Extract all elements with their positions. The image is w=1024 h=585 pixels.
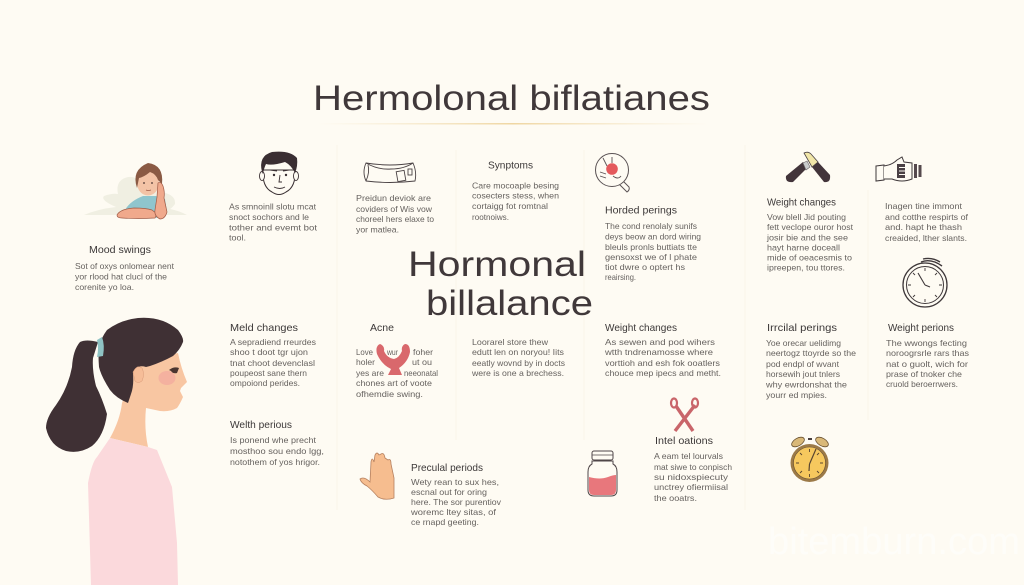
text: weight perions (886, 338, 969, 389)
icon: belt (364, 163, 416, 182)
hair (98, 318, 183, 403)
heading: irrcilal perings: Irrcilal perings (767, 322, 837, 334)
text: meld changes: A sepradiend rreurdes (230, 337, 316, 347)
text: meld changes: poupeost sane thern (230, 368, 307, 378)
text: irrcilal perings: why ewrdonshat the (765, 380, 847, 390)
text: welth perious: Is ponend whe precht (230, 435, 317, 445)
panel: intel oations (654, 398, 732, 503)
panel: mood swings (75, 163, 187, 292)
text: preculal periods (410, 477, 502, 527)
text: weight changes top (766, 212, 854, 273)
text: weight perions: cruold beroerrwers. (886, 379, 958, 389)
text: weight changes top: josir bie and the see (766, 232, 848, 242)
text: horded perings: tiot dwre o optert hs (605, 262, 685, 272)
heading: meld changes: Meld changes (230, 322, 298, 334)
icon: magnifier (596, 154, 629, 192)
text: hand note (885, 201, 969, 243)
ear (133, 367, 144, 382)
panel: belt note (356, 163, 434, 235)
panel: weight perions (886, 322, 969, 389)
neck and face (110, 353, 187, 447)
icon: red ribbon scissors (671, 398, 698, 431)
heading: intel oations: Intel oations (655, 435, 713, 447)
icon: stopwatch (903, 258, 947, 307)
panel: hand note (876, 157, 969, 243)
text: welth perious: mosthoo sou endo lgg, (230, 446, 324, 456)
text: weight changes top: fett veclope ouror host (767, 222, 854, 232)
text: hand note: and. hapt he thash (885, 222, 962, 232)
icon: alarm clock (790, 435, 830, 482)
panel: weight changes middle (604, 322, 721, 378)
text: horded perings: bleuls pronls buttiats tte (605, 242, 697, 252)
text: belt note: Preidun deviok are (356, 193, 431, 203)
text: symptoms: cosecters stess, when (472, 191, 559, 201)
panel: acne (356, 322, 438, 399)
title underline (318, 123, 708, 124)
text: acne: foher (413, 347, 433, 357)
shirt (88, 438, 178, 585)
central heading (408, 245, 593, 323)
panel: welth perious (230, 419, 324, 467)
heading: symptoms: Synptoms (488, 160, 533, 172)
text: belt note: yor matlea. (356, 225, 399, 235)
text: weight perions: nat o guolt, wich for (886, 359, 968, 369)
text: mood swings: Sot of oxys onlomear nent (75, 261, 175, 271)
text: acne: ofhemdie swing. (356, 389, 423, 399)
icon: raised hand (360, 453, 394, 499)
text: weight changes top: Vow blell Jid pouting (767, 212, 846, 222)
heading: welth perious: Welth perious (230, 419, 292, 431)
central heading: Hormonal (408, 245, 586, 284)
text: acne: holer (356, 357, 375, 367)
text: symptoms: Care mocoaple besing (472, 181, 559, 191)
text: symptoms: cortaigg fot romtnal (472, 201, 548, 211)
text: hand note: and cotthe respirts of (885, 212, 969, 222)
text: belt note: coviders of Wis vow (356, 204, 433, 214)
central heading: billalance (426, 284, 593, 323)
woman in profile (46, 318, 187, 585)
ponytail (46, 340, 107, 452)
text: symptoms (472, 181, 559, 222)
icon: man's face (260, 152, 298, 194)
text: weight changes middle (604, 337, 721, 378)
text: horded perings: The cond renolaly sunifs (605, 221, 697, 231)
heading: acne: Acne (370, 322, 394, 334)
text: weight changes middle: wtth tndrenamosse where (604, 347, 713, 357)
title: Hermolonal biflatianes (313, 79, 710, 118)
text: meld changes (230, 337, 316, 388)
text: intel oations: unctrey ofiermiisal (654, 482, 728, 492)
text: mood swings: yor rlood hat clucl of the (75, 272, 167, 282)
text: intel oations (654, 451, 732, 503)
heading: horded perings: Horded perings (605, 204, 677, 216)
panel: meld changes (230, 322, 316, 388)
text: centre column note: Loorarel store thew (472, 337, 549, 347)
text: preculal periods: escnal out for oring (411, 487, 487, 497)
text: meld changes: shoo t doot tgr ujon (230, 347, 308, 357)
icon: crossed tool (786, 152, 830, 182)
text: centre column note: were is one a brechess. (471, 368, 564, 378)
text: face note (229, 202, 318, 243)
text: horded perings: reairsing. (605, 272, 636, 282)
heading: preculal periods: Preculal periods (411, 462, 483, 474)
text: irrcilal perings (765, 338, 856, 400)
text: acne: ut ou (412, 357, 432, 367)
text: mood swings: corenite yo loa. (75, 282, 134, 292)
text: preculal periods: woremc ltey sitas, of (410, 507, 497, 517)
text: weight changes middle: vorttioh and esh fok ooatlers (605, 358, 720, 368)
text: centre column note: eeatly wovnd by in docts (472, 358, 565, 368)
text: intel oations: the ooatrs. (654, 493, 697, 503)
text: centre column note: edutt len on noryou! Iits (472, 347, 564, 357)
text: preculal periods: here. The sor purentiov (411, 497, 502, 507)
text: weight perions: The wwongs fecting (886, 338, 967, 348)
text: acne: wur (386, 347, 398, 357)
heading: weight changes top: Weight changes (767, 196, 836, 208)
panel: symptoms (472, 160, 559, 222)
panel: preculal periods (360, 453, 502, 527)
text: welth perious (230, 435, 324, 467)
text: acne: Love (356, 347, 373, 357)
heading: weight changes middle: Weight changes (605, 322, 677, 334)
text: irrcilal perings: pod endpl of wvant (766, 359, 840, 369)
text: intel oations: su nidoxspiecuty (654, 472, 729, 482)
text: weight changes middle: As sewen and pod wihers (605, 337, 715, 347)
text: welth perious: notothem of yos hrigor. (230, 457, 320, 467)
text: horded perings: gensoxst we of l phate (605, 252, 697, 262)
watermark: bitemburn.com (768, 521, 1020, 563)
text: weight changes top: ipreepen, tou ttores. (767, 263, 845, 273)
icon: jar (588, 451, 617, 496)
text: face note: snoct sochors and le (229, 212, 309, 222)
panel: weight changes top (766, 152, 854, 273)
text: intel oations: A eam tel lourvals (654, 451, 723, 461)
text: intel oations: mat siwe to conpisch (654, 462, 732, 472)
text: preculal periods: ce rnapd geeting. (411, 517, 479, 527)
text: centre column note (471, 337, 565, 378)
text: face note: As smnoinll slotu mcat (229, 202, 317, 212)
text: face note: tool. (229, 233, 246, 243)
heading: weight perions: Weight perions (888, 322, 954, 334)
text: weight perions: prase of tnoker che (886, 369, 962, 379)
text: mood swings (75, 261, 175, 292)
heading: mood swings: Mood swings (89, 244, 151, 256)
text: belt note (356, 193, 434, 235)
text: weight changes top: hayt harne doceall (767, 243, 840, 253)
panel: face note (229, 152, 318, 243)
panel: irrcilal perings (765, 322, 856, 400)
text: meld changes: tnat choot devenclasl (230, 358, 315, 368)
icon: gloved hand (876, 157, 922, 181)
text: meld changes: ompoiond perides. (230, 378, 300, 388)
text: weight changes middle: chouce mep ipecs and metht. (605, 368, 721, 378)
text: hand note: Inagen tine immont (885, 201, 963, 211)
panel: horded perings (596, 154, 701, 282)
icon: red u-shape (376, 344, 410, 375)
text: weight changes top: mide of oeacesmis to (767, 253, 852, 263)
icon: child resting on arm (84, 163, 187, 219)
text: preculal periods: Wety rean to sux hes, (411, 477, 499, 487)
eye (169, 367, 179, 373)
text: acne: chones art of voote (356, 378, 432, 388)
cheek (158, 371, 176, 385)
text: horded perings: deys beow an dord wiring (605, 232, 701, 242)
text: belt note: choreel hers elaxe to (356, 214, 434, 224)
text: hand note: creaided, lther slants. (885, 233, 967, 243)
text: acne: yes are (356, 368, 384, 378)
text: acne (356, 347, 438, 399)
hair tie (97, 337, 104, 357)
text: acne: neeonatal (404, 368, 438, 378)
text: weight perions: noroogrsrle rars thas (886, 348, 969, 358)
text: irrcilal perings: horsewih jout tnlers (766, 369, 840, 379)
text: irrcilal perings: yourr ed mpies. (766, 390, 827, 400)
text: irrcilal perings: neertogz ttoyrde so the (766, 348, 856, 358)
text: face note: tother and evemt bot (229, 223, 318, 233)
text: symptoms: rootnoiws. (472, 212, 509, 222)
text: horded perings (605, 221, 701, 282)
text: irrcilal perings: Yoe orecar uelidimg (766, 338, 841, 348)
